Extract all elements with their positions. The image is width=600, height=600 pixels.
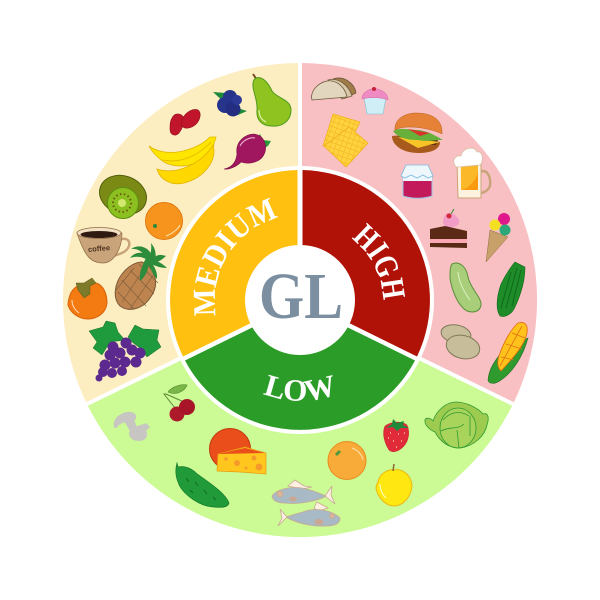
icon: cherries: [164, 385, 195, 422]
icon: mushrooms: [114, 412, 150, 441]
icon: cucumber: [176, 463, 229, 507]
icon: corn: [488, 323, 528, 383]
icon: kiwi: [94, 169, 152, 221]
icon: bananas: [149, 137, 216, 184]
label: LOW: LOW: [263, 374, 333, 401]
icon: red beans: [170, 109, 200, 135]
label: MEDIUM: MEDIUM: [194, 198, 278, 316]
icon: bread: [312, 78, 356, 100]
icon: burger: [392, 113, 443, 153]
icon: ice cream: [486, 213, 510, 262]
icon: waffles: [323, 114, 368, 167]
icon: pear: [253, 74, 291, 126]
ring segment: high: [302, 170, 430, 356]
icon: grapes: [89, 321, 161, 382]
icon: pineapple: [115, 243, 167, 309]
ring segment: medium: [170, 170, 298, 356]
white sector dividers: [87, 63, 513, 404]
icon: fish bottom: [278, 502, 340, 526]
label: HIGH: HIGH: [352, 222, 405, 300]
outer sector: low foods background: [87, 300, 513, 537]
icon: peach orange: [328, 442, 366, 480]
icon: coffee cup: coffee: [88, 243, 110, 254]
icon: potatoes: [440, 323, 482, 362]
icon: cupcake: [362, 87, 388, 114]
icon: strawberry: [384, 419, 409, 452]
icon: yellow apple: [376, 464, 412, 506]
ring segment: low: [185, 304, 415, 430]
icon: orange: [146, 202, 182, 240]
icon: persimmon: [68, 278, 107, 319]
outer sector: high foods background: [300, 63, 537, 404]
icon: beet: [224, 134, 271, 169]
icon: fish top: [272, 480, 335, 504]
icon: blueberries: [213, 90, 247, 116]
icon: cheese: [210, 428, 266, 474]
icon: green vegetable: [497, 262, 525, 317]
icon: cabbage: [425, 402, 488, 448]
icon: beer mug: [454, 148, 490, 198]
center white circle: [245, 245, 355, 355]
icon: zucchini: [450, 263, 481, 312]
icon: coffee cup: [77, 228, 129, 263]
outer sector: medium foods background: [63, 63, 300, 404]
icon: jam jar: [401, 165, 433, 198]
icon: cake slice: [430, 209, 467, 248]
ring white backing: [166, 166, 434, 434]
center title: GL: GL: [259, 260, 343, 333]
